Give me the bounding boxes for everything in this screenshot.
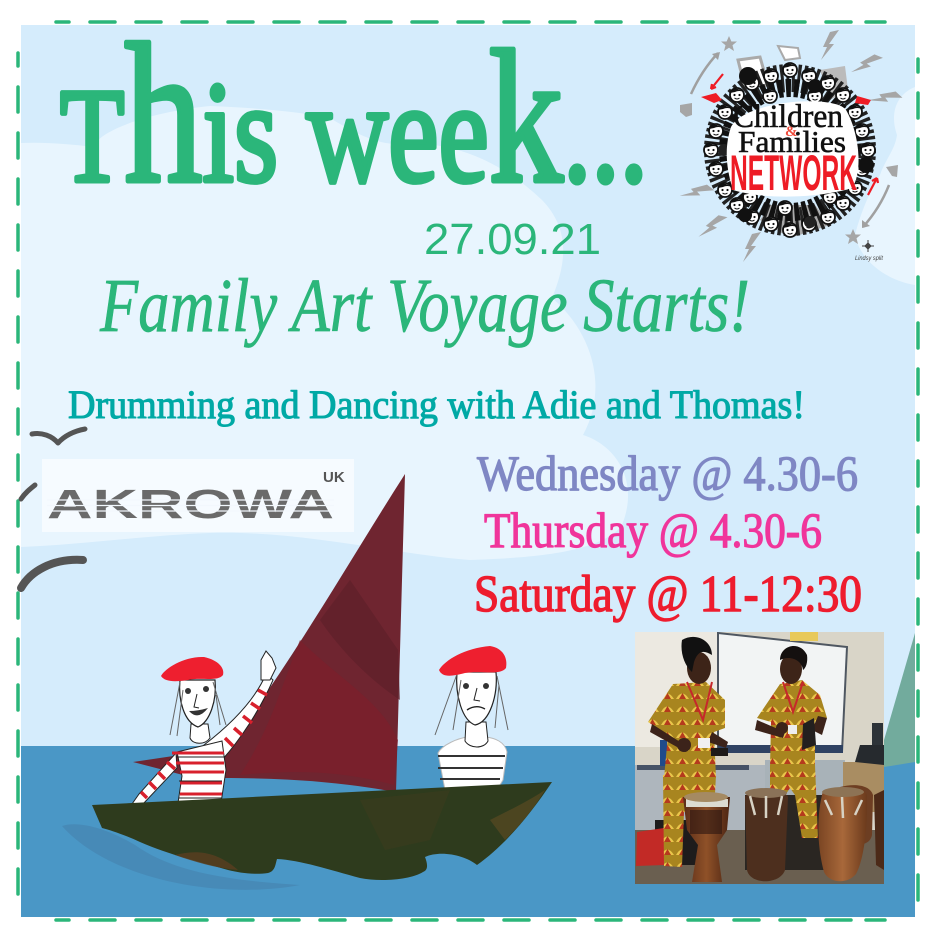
hull [92, 782, 552, 880]
photo: two drummers in a classroom [635, 632, 884, 884]
left figure waving [132, 651, 276, 804]
distant teal sail [884, 633, 915, 767]
drums [683, 797, 730, 882]
icon: seagull birds [21, 429, 85, 588]
schedule [474, 445, 862, 623]
small maker mark [855, 240, 883, 262]
thursday session: Thursday @ 4.30-6 [484, 502, 822, 558]
grey doodles [680, 30, 902, 262]
left drummer [663, 775, 716, 867]
title: This week... [60, 4, 648, 225]
wave under the boat [62, 824, 300, 890]
logo wordmark: & [785, 124, 798, 140]
saturday session: Saturday @ 11-12:30 [474, 566, 862, 623]
logo wordmark: Children [733, 99, 843, 135]
children and families network logo [680, 30, 902, 262]
akrowa logo [42, 459, 354, 532]
classroom wall [635, 632, 884, 884]
large cloud [21, 106, 628, 560]
sailing boat [92, 474, 552, 880]
logo wordmark [730, 99, 857, 201]
network character ring [701, 63, 878, 237]
wednesday session: Wednesday @ 4.30-6 [477, 445, 858, 501]
sail [133, 474, 405, 792]
sea [21, 746, 915, 917]
right figure [435, 646, 508, 790]
akrowa logo: UK [323, 469, 345, 486]
headline: family art voyage: Family Art Voyage Starts! [99, 264, 750, 348]
small maker mark: Lindsy split [855, 256, 883, 262]
right drummer [770, 765, 818, 838]
date: 27.09.21 [424, 215, 601, 264]
right cloud [855, 87, 915, 285]
white centre plate [727, 101, 859, 197]
akrowa logo: AKROWA [47, 481, 334, 527]
logo wordmark: Families [738, 124, 846, 159]
subheading: drumming and dancing: Drumming and Dancing with Adie and Thomas! [68, 382, 805, 427]
